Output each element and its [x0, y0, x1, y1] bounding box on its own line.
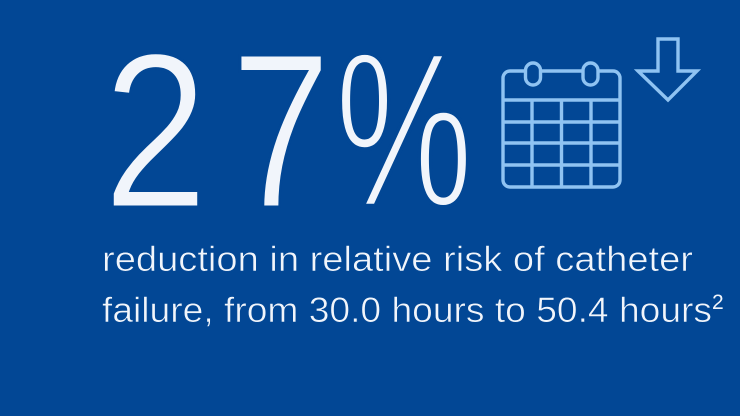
headline statistic: 27%: % — [335, 6, 473, 253]
icon: calendar — [503, 63, 620, 187]
description text — [102, 240, 724, 330]
description text: reduction in relative risk of catheter — [102, 240, 693, 279]
headline statistic: 27%: 2 — [103, 7, 208, 254]
description text: 2 — [712, 291, 724, 314]
headline statistic: 27% — [103, 6, 473, 254]
description text: failure, from 30.0 hours to 50.4 hours — [102, 291, 712, 330]
headline statistic: 27%: 7 — [231, 7, 331, 254]
icon: down arrow — [638, 39, 697, 100]
